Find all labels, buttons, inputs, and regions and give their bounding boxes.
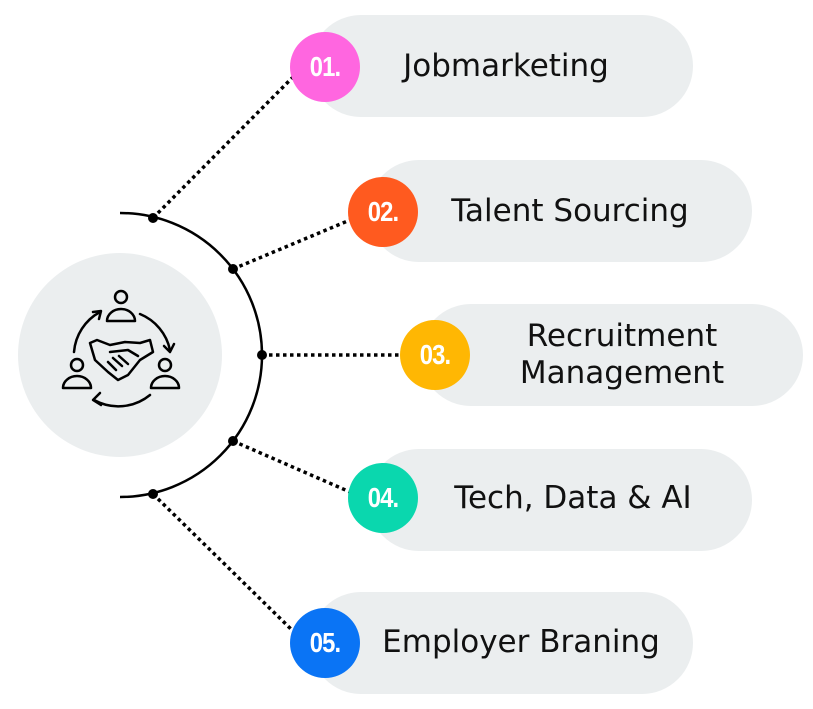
badge 03: 03. <box>420 339 450 370</box>
badge 04 <box>348 463 418 533</box>
center circle <box>18 253 222 457</box>
badge 05 <box>290 608 360 678</box>
label 2: Talent Sourcing <box>451 193 689 229</box>
label 5: Employer Braning <box>382 624 660 660</box>
label 3 <box>520 318 724 391</box>
pill 5 <box>310 592 693 694</box>
label 3: Management <box>520 355 724 391</box>
badge 02: 02. <box>368 196 398 227</box>
dots <box>148 213 267 499</box>
pill 1 <box>310 15 693 117</box>
badge 01 <box>290 32 360 102</box>
pill 4 <box>368 449 752 551</box>
pill 2 <box>368 160 752 262</box>
icon: teamwork handshake <box>63 291 179 406</box>
label 4: Tech, Data & AI <box>454 480 692 516</box>
label 1: Jobmarketing <box>403 48 609 84</box>
arc <box>120 213 262 497</box>
badge 01: 01. <box>310 51 340 82</box>
badge 03 <box>400 320 470 390</box>
pill 3 <box>420 304 803 406</box>
badge 05: 05. <box>310 627 340 658</box>
dotted lines <box>153 75 402 633</box>
badge 04: 04. <box>368 482 398 513</box>
label 3: Recruitment <box>527 318 717 354</box>
badge 02 <box>348 177 418 247</box>
